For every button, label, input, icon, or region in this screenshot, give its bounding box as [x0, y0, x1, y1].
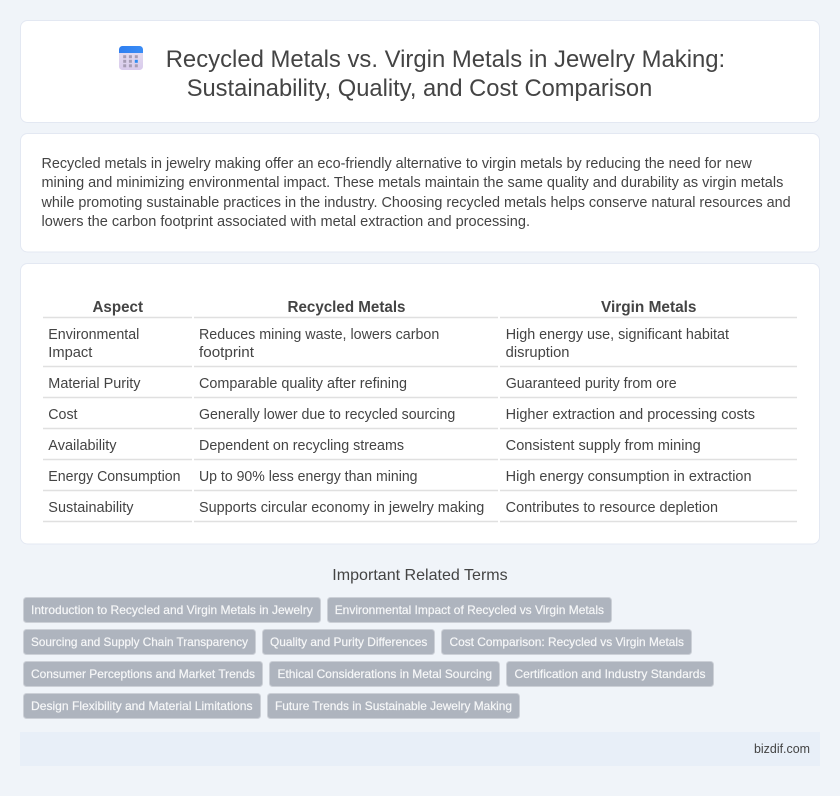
footer bar: [20, 732, 820, 766]
tag: consumer perceptions: Consumer Perceptions and Market Trends: [31, 667, 255, 681]
row: environmental impact: Environmental: [48, 327, 139, 343]
tag: sourcing: Sourcing and Supply Chain Transparency: [31, 635, 248, 649]
table header row: [43, 299, 797, 318]
row: sustainability: Supports circular economy in jewelry making: [199, 500, 484, 516]
row: availability: Availability: [48, 438, 117, 454]
row: cost: Higher extraction and processing costs: [506, 407, 755, 423]
row: sustainability: [43, 500, 797, 522]
row: cost: [43, 407, 797, 428]
header panel: [20, 20, 820, 122]
icon: calendar: [119, 46, 143, 70]
row: energy consumption: [43, 469, 797, 490]
row: sustainability: Sustainability: [48, 500, 134, 516]
row: sustainability: Contributes to resource depletion: [506, 500, 718, 516]
row: material purity: Comparable quality after refining: [199, 376, 407, 392]
tag: introduction: Introduction to Recycled and Virgin Metals in Jewelry: [31, 603, 313, 617]
tag: design flexibility: Design Flexibility and Material Limitations: [31, 699, 253, 713]
tag: design flexibility: [24, 694, 260, 718]
tag: ethical considerations: [270, 662, 500, 686]
row: environmental impact: High energy use, significant habitat: [506, 327, 729, 343]
tag: cost comparison: [442, 630, 692, 654]
tag: future trends: [268, 694, 520, 718]
row: cost: Cost: [48, 407, 78, 423]
related terms tags: [24, 598, 714, 718]
row: environmental impact: footprint: [199, 345, 254, 361]
title: Recycled Metals vs. Virgin Metals in Jewelry Making:: [166, 46, 725, 73]
row: energy consumption: Up to 90% less energy than mining: [199, 469, 418, 485]
row: energy consumption: Energy Consumption: [48, 469, 180, 485]
tag: cost comparison: Cost Comparison: Recycled vs Virgin Metals: [450, 635, 684, 649]
tag: environmental impact: Environmental Impact of Recycled vs Virgin Metals: [335, 603, 604, 617]
heading: important related terms: Important Related Terms: [332, 567, 508, 584]
tag: environmental impact: [328, 598, 612, 622]
row: material purity: Guaranteed purity from ore: [506, 376, 677, 392]
tag: ethical considerations: Ethical Considerations in Metal Sourcing: [278, 667, 492, 681]
tag: certification: Certification and Industry Standards: [514, 667, 706, 681]
row: availability: Consistent supply from mining: [506, 438, 701, 454]
tag: quality: Quality and Purity Differences: [270, 635, 427, 649]
tag: introduction: [24, 598, 320, 622]
row: material purity: Material Purity: [48, 376, 141, 392]
row: energy consumption: High energy consumption in extraction: [506, 469, 752, 485]
title: Sustainability, Quality, and Cost Comparison: [187, 75, 652, 102]
row: environmental impact: disruption: [506, 345, 570, 361]
tag: future trends: Future Trends in Sustainable Jewelry Making: [275, 699, 512, 713]
footer credit: bizdif.com: [754, 742, 810, 756]
row: environmental impact: Impact: [48, 345, 92, 361]
title: [166, 46, 725, 102]
row: availability: [43, 438, 797, 460]
table header row: Recycled Metals: [288, 299, 406, 316]
tag: quality: [262, 630, 434, 654]
intro text block: Recycled metals in jewelry making offer an eco-friendly alternative to virgin metals by reducing the need for new: [42, 156, 752, 172]
panel: introduction: [20, 134, 820, 252]
table header row: Virgin Metals: [601, 299, 697, 316]
tag: consumer perceptions: [24, 662, 262, 686]
panel: comparison table: [20, 264, 820, 544]
intro text block: mining and minimizing environmental impact. These metals maintain the same quality and durability as virgin metals: [42, 175, 783, 191]
intro text block: [40, 156, 791, 230]
table header row: Aspect: [92, 299, 144, 316]
intro text block: lowers the carbon footprint associated with metal extraction and processing.: [42, 214, 530, 230]
row: availability: Dependent on recycling streams: [199, 438, 404, 454]
row: environmental impact: [43, 327, 797, 366]
row: material purity: [43, 376, 797, 398]
intro text block: while promoting sustainable practices in the industry. Choosing recycled metals helps conserve natural resources and: [40, 195, 791, 211]
row: environmental impact: Reduces mining waste, lowers carbon: [199, 327, 439, 343]
row: cost: Generally lower due to recycled sourcing: [199, 407, 455, 423]
tag: certification: [506, 662, 714, 686]
tag: sourcing: [24, 630, 256, 654]
